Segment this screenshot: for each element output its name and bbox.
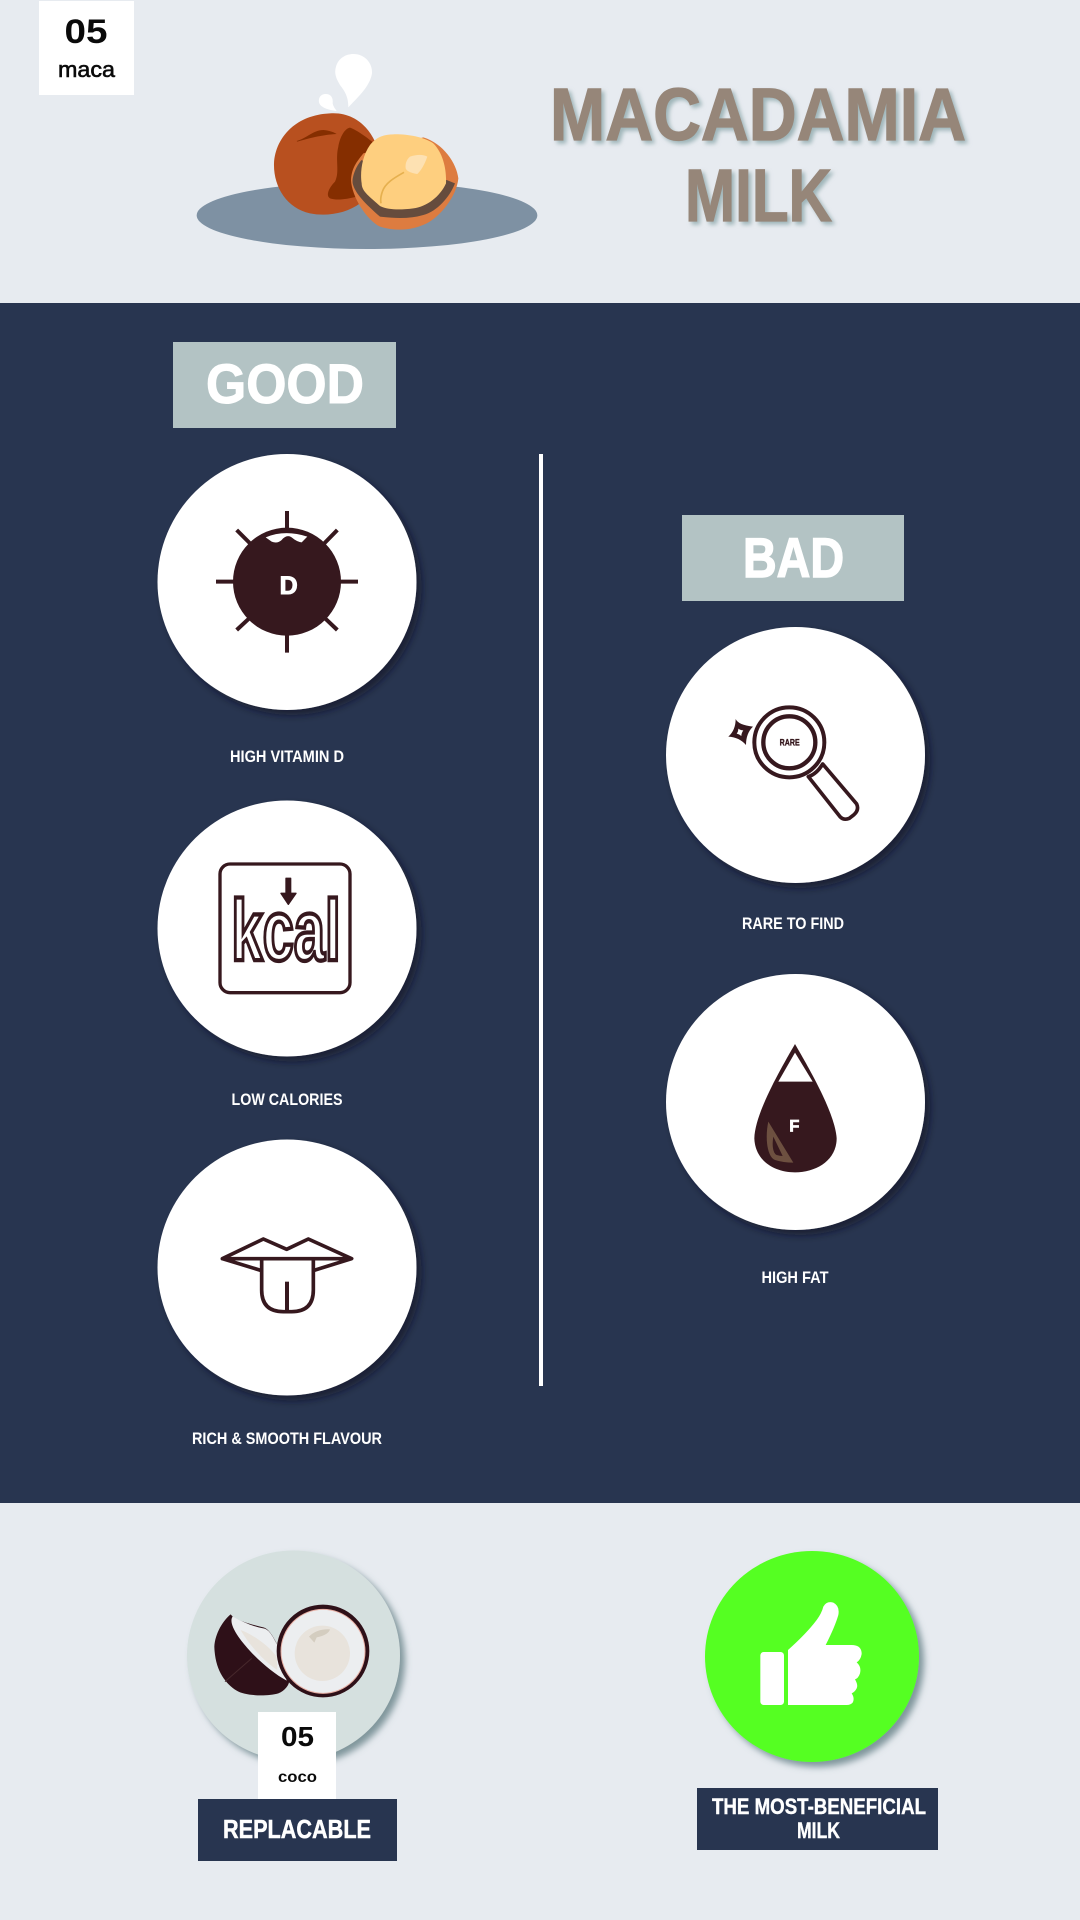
label: HIGH VITAMIN D — [230, 747, 344, 766]
heading: bad: BAD — [743, 526, 844, 589]
title: MILK — [685, 154, 832, 237]
badge: 05 maca: 05 — [64, 13, 108, 51]
caption: the most-beneficial milk: THE MOST-BENEFICIAL — [712, 1794, 926, 1819]
icon: mouth with tongue — [222, 1239, 352, 1312]
badge: 05 coco — [258, 1712, 336, 1799]
group: most beneficial — [697, 1551, 938, 1850]
title: MACADAMIA — [550, 73, 966, 156]
badge: 05 maca — [39, 1, 134, 95]
heading: good: GOOD — [206, 352, 364, 415]
icon: magnifying glass: RARE — [780, 737, 800, 747]
badge: 05 coco: coco — [278, 1769, 317, 1786]
label: LOW CALORIES — [232, 1090, 342, 1109]
caption: replacable: REPLACABLE — [223, 1814, 371, 1844]
item: high fat — [666, 974, 925, 1287]
panel: header — [0, 0, 1080, 303]
group: replacable coconut — [187, 1550, 400, 1861]
panel: footer — [0, 1503, 1080, 1920]
badge: 05 coco: 05 — [281, 1721, 314, 1752]
icon: kcal: kcal — [231, 883, 341, 979]
item: rich and smooth flavour — [158, 1140, 416, 1448]
icon: magnifying glass — [728, 707, 858, 819]
heading: bad — [682, 515, 904, 601]
label: RICH & SMOOTH FLAVOUR — [192, 1429, 382, 1448]
caption: replacable — [198, 1799, 397, 1861]
heading: good — [173, 342, 396, 428]
icon: fat drop — [754, 1044, 837, 1172]
icon: vitamin d sun: D — [280, 572, 298, 600]
icon: fat drop: F — [789, 1117, 799, 1136]
title — [550, 73, 966, 237]
item: high vitamin d — [158, 454, 416, 766]
icon: vitamin d sun — [216, 511, 358, 653]
divider — [539, 454, 543, 1386]
illustration: macadamia nuts on plate — [197, 54, 537, 249]
label: RARE TO FIND — [742, 914, 844, 933]
panel: good and bad — [0, 303, 1080, 1503]
item: low calories — [158, 800, 416, 1109]
icon: thumbs up — [760, 1602, 862, 1705]
caption: the most-beneficial milk — [697, 1788, 938, 1850]
badge: 05 maca: maca — [58, 57, 116, 82]
caption: the most-beneficial milk: MILK — [797, 1818, 840, 1843]
item: rare to find — [666, 627, 925, 933]
icon: coconut — [214, 1605, 369, 1697]
label: HIGH FAT — [762, 1268, 829, 1287]
icon: kcal — [220, 864, 350, 993]
